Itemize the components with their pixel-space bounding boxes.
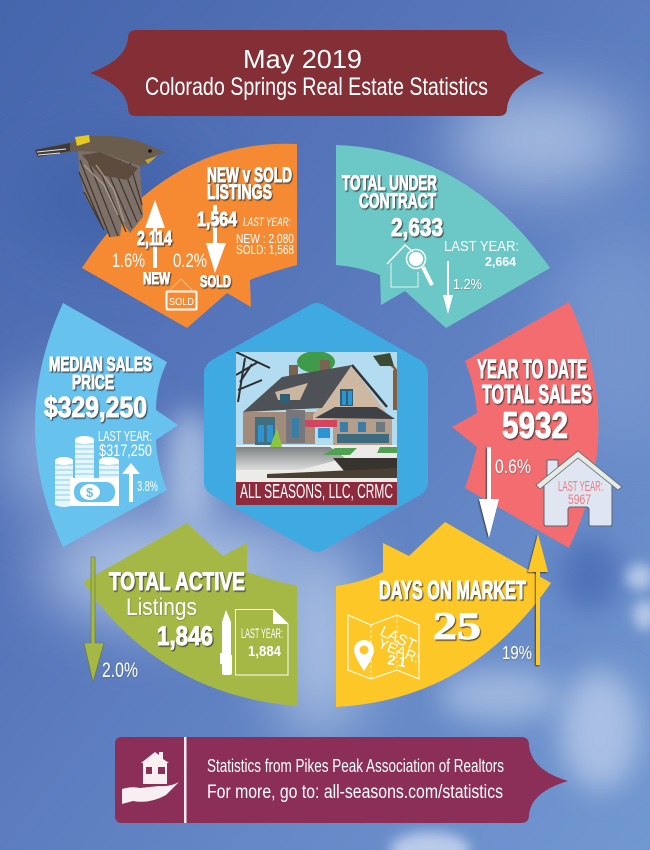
icon: document with last year [236,610,288,675]
value: 25 [433,605,481,648]
title: city statistics: Colorado Springs Real Estate Statistics [145,73,488,101]
value: sold: 1,564 [197,209,238,231]
icon: house on hand [122,752,179,804]
last year: 2,664 [485,254,517,269]
percent: new: 1.6% [112,251,145,272]
arrow: down [479,447,499,538]
icon: house with last year [536,451,622,526]
icon: map with last year [348,615,422,679]
icon: pen [220,610,232,675]
heading: NEW v SOLD [207,164,292,187]
arrow: new up [145,200,165,268]
heading [49,354,152,394]
value: $329,250 [44,392,147,424]
title ribbon [90,30,544,116]
heading: CONTRACT [359,190,436,213]
panel: year to date total sales [452,302,622,548]
icon: house and magnifier [387,245,432,287]
logo banner text: ALL SEASONS, LLC, CRMC [240,481,393,503]
heading: PRICE [72,372,114,394]
icon: map with last year: LAST [377,623,419,654]
icon: map with last year: YEAR: [376,636,422,667]
value: 1,846 [157,621,213,651]
heading [477,354,592,409]
panel: new v sold listings [35,135,297,328]
title: month: May 2019 [243,44,362,74]
last year figures: SOLD: 1,568 [236,243,294,257]
arrow: down [84,557,104,682]
panel: center hexagon [204,303,428,552]
heading: DAYS ON MARKET [379,575,526,605]
last year: LAST YEAR: [444,238,519,255]
panel: median sales price [35,303,178,547]
value: 2,633 [391,214,443,242]
footer text: For more, go to: all-seasons.com/statistics [207,782,503,803]
last year figures: LAST YEAR: [243,215,291,229]
panel: total active listings [83,523,297,706]
arrow: up [528,534,548,665]
heading: LISTINGS [207,181,272,204]
footer text: Statistics from Pikes Peak Association of Realtors [207,756,504,776]
label: new: NEW [143,269,171,288]
icon: house with last year: LAST YEAR: [558,478,603,495]
heading: MEDIAN SALES [49,354,152,376]
icon: coins and banknote [55,436,119,507]
icon: document with last year: 1,884 [248,643,282,660]
last year: LAST YEAR: [98,429,152,445]
footer ribbon [115,737,568,823]
arrow: down [443,261,453,314]
logo: house illustration [236,351,397,505]
heading [342,172,437,213]
bird photo [35,135,166,237]
subheading: Listings [126,594,197,621]
icon: map with last year: 21 [386,651,411,671]
value: new: 2,114 [137,228,173,250]
heading: TOTAL ACTIVE [109,568,245,596]
label: sold: SOLD [200,272,231,291]
percent: 1.2% [453,276,482,293]
icon: sold sign [166,279,198,310]
heading [207,164,292,204]
last year figures: NEW : 2.080 [236,232,294,246]
icon: document with last year: LAST YEAR: [241,625,283,641]
percent: 0.6% [495,457,531,478]
percent: sold: 0.2% [173,251,207,272]
percent: 19% [502,643,532,663]
last year [444,238,519,269]
last year figures [236,215,294,257]
arrow: up [122,463,140,502]
last year [98,429,152,460]
icon: coins and banknote: $ [86,485,94,500]
value: 5932 [502,405,568,446]
percent: 2.0% [102,659,138,682]
heading: TOTAL UNDER [342,172,437,195]
percent: 3.8% [137,478,158,495]
footer text [207,756,504,803]
panel: total under contract [336,145,550,328]
icon: house with last year: 5967 [568,491,591,507]
arrow: sold down [206,205,226,273]
last year: $317,250 [99,441,152,460]
icon: sold sign: SOLD [169,297,194,308]
panel: days on market [336,522,551,707]
